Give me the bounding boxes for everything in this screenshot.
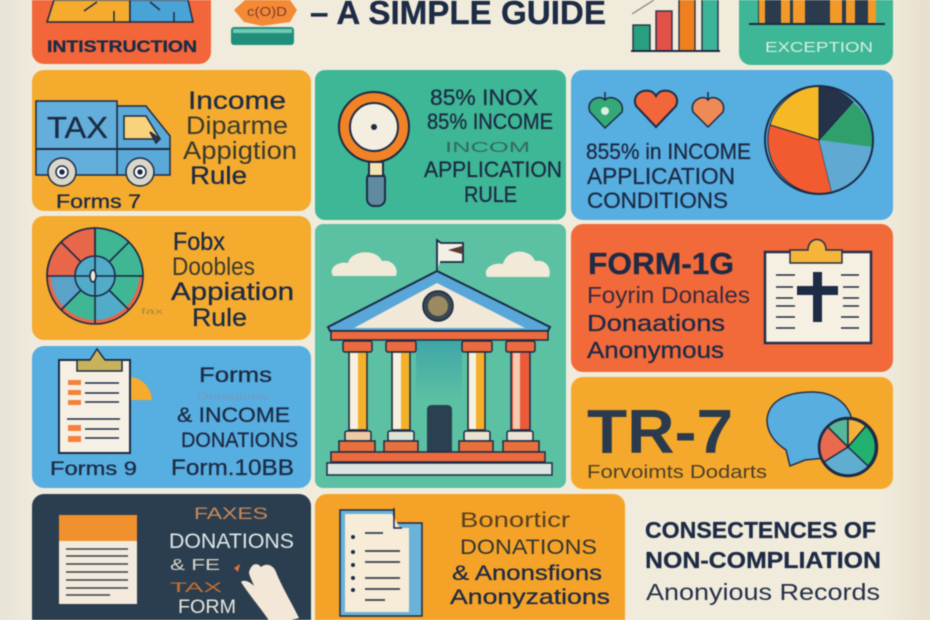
text block: consequences of non-compliance: NON-COMPLIATION [645,547,881,573]
text block: consequences of non-compliance: Anonyious Records [646,579,880,605]
pie chart [765,86,873,194]
icon: clipboard with cross [765,240,871,343]
text block: Rule [192,304,247,332]
icon: building columns [749,0,885,24]
icon: document [59,515,137,604]
text block: FAXES [194,504,268,523]
text block: 855% in INCOME [586,139,751,164]
panel: tax truck: TAX [47,110,108,145]
panel: institution [32,0,211,64]
text block: Diparme [186,112,288,140]
icon: magnifying glass [339,92,409,206]
text block [586,139,751,213]
text block: DONATIONS [460,536,597,559]
text block [171,228,294,332]
text block: APPLICATION [587,163,735,189]
text block: Donaations [587,310,725,336]
panel: form anonymous donations [571,224,893,372]
icon: clouds [332,252,550,277]
panel: donations and anonymous [315,494,625,620]
icon: figures [47,0,193,22]
icon: speech bubble [767,392,852,466]
text block: & Anonsfions [452,562,602,585]
icon: segmented wheel [47,228,143,324]
text block: Donations [197,392,268,403]
text block: 85% INOX [430,85,538,110]
panel: tax truck [32,70,311,213]
faded note: fax [141,307,163,316]
text block: consequences of non-compliance [645,517,881,605]
text block: FORM [178,597,236,618]
text block: Rule [190,162,247,190]
text block [183,87,297,190]
panel: magnifier rule [315,70,566,220]
text block: Fobx [173,228,225,256]
heading: form label: FORM-1G [588,246,734,281]
icon: seal on stand: c(O)D [247,4,287,19]
icon: building [327,240,552,475]
icon: small pie chart [819,418,877,476]
panel: tax donations form [32,494,311,620]
text block [450,509,610,609]
text block: & FE [170,557,220,574]
text block: CONDITIONS [587,188,728,213]
bar chart [631,0,720,51]
text block: Anonyzations [450,586,610,609]
forms caption: Forms 9 [50,459,137,480]
text block: INCOM [445,139,530,156]
text block [171,364,298,480]
text block: Foyrin Donales [587,282,750,308]
panel: exception [739,0,893,65]
panel: wheel rule [32,216,311,340]
text block: TAX [170,579,223,595]
text block: Form.10BB [171,455,294,480]
icon: seal on stand [231,0,297,45]
text block: Appigtion [183,137,297,165]
forms caption: Forms 7 [56,192,141,213]
text block: Doobles [172,253,255,281]
text block [169,504,294,618]
text block: DONATIONS [181,429,298,452]
text block: & INCOME [177,404,290,427]
text block: Anonymous [587,337,724,363]
panel: government building [315,224,566,488]
heading: institution label: INTISTRUCTION [47,37,197,56]
text block: Bonorticr [460,509,570,532]
panel: TR-7 [571,377,893,489]
text block: DONATIONS [169,530,294,553]
panel: application conditions [571,70,893,220]
icon: folded document [340,508,422,616]
text block: RULE [464,182,517,207]
heading: TR-7: TR-7 [587,398,733,467]
exception label: EXCEPTION [765,39,873,56]
icon: tax truck [36,101,170,186]
icon: hearts [589,91,724,128]
text block: 85% INCOME [427,109,553,134]
panel: forms and income [32,346,311,488]
text block: APPLICATION [424,157,562,182]
text block [424,85,562,207]
icon: clipboard [59,349,152,453]
text block: Appiation [171,278,294,306]
text block: Forms [199,364,272,387]
text block: consequences of non-compliance: CONSECTENCES OF [645,517,876,543]
text block [587,282,750,363]
caption: Forvoimts Dodarts [587,462,767,482]
icon: pointing hand [234,564,299,620]
text block: Income [188,87,286,115]
